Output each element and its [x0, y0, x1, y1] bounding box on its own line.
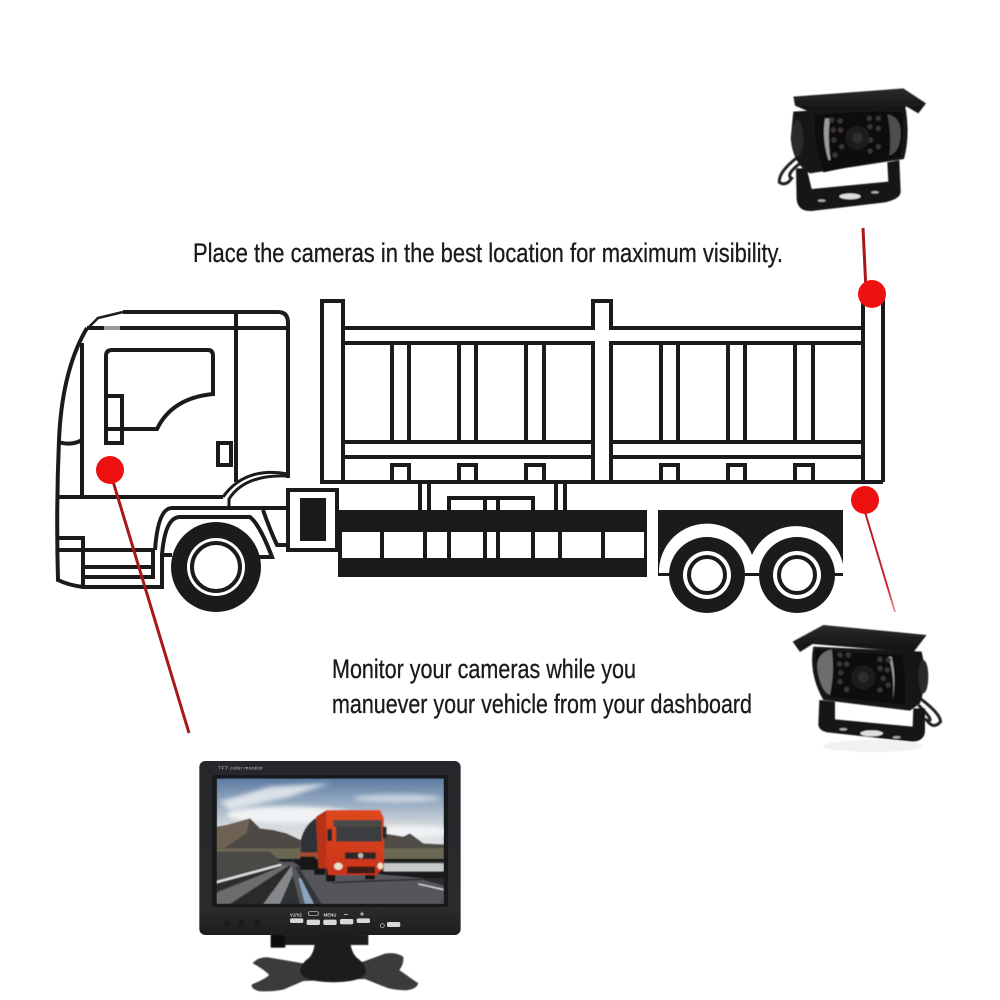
monitor stand: [252, 933, 418, 991]
red marker: lower rear: [851, 486, 879, 514]
rear wheel 1: [669, 537, 745, 613]
monitor bezel: [199, 761, 461, 935]
truck cab: [57, 312, 288, 612]
rear wheel 2: [759, 537, 835, 613]
connector line: top rear camera: [863, 228, 866, 290]
icon: lower rear camera: [793, 625, 941, 752]
monitor indicator knobs: [224, 920, 261, 927]
truck on screen: [299, 810, 387, 882]
heading: camera placement: Place the cameras in the best location for maximum visibility.: [193, 238, 783, 268]
red marker: top rear: [858, 280, 886, 308]
road: [217, 862, 444, 904]
text block: monitor instructions: manuever your vehicle from your dashboard: [332, 689, 752, 719]
mountains: [217, 818, 301, 850]
door handle: [218, 443, 231, 465]
cab to body coupling box: [288, 490, 337, 550]
front wheel: [171, 522, 261, 612]
text block: monitor instructions: [332, 654, 752, 719]
side window: [106, 350, 213, 443]
icon: top rear camera: [779, 88, 926, 211]
monitor control buttons: [290, 909, 400, 928]
icon: dashboard monitor: [199, 761, 461, 991]
monitor control buttons: V1/V2: [290, 912, 302, 917]
truck line drawing: [57, 295, 883, 613]
monitor brand label: TFT color monitor: [218, 765, 263, 771]
connector line: lower rear camera: [864, 512, 896, 612]
text block: monitor instructions: Monitor your cameras while you: [332, 654, 636, 684]
connector line: dashboard to monitor: [112, 478, 189, 733]
monitor control buttons: +: [360, 909, 365, 918]
monitor control buttons: −: [344, 910, 348, 919]
monitor control buttons: MENU: [324, 912, 336, 917]
chassis: [338, 510, 844, 577]
dump body frame: [322, 295, 883, 510]
monitor screen photo: [216, 778, 444, 904]
red marker: dashboard: [96, 456, 124, 484]
mirror: [106, 396, 122, 443]
